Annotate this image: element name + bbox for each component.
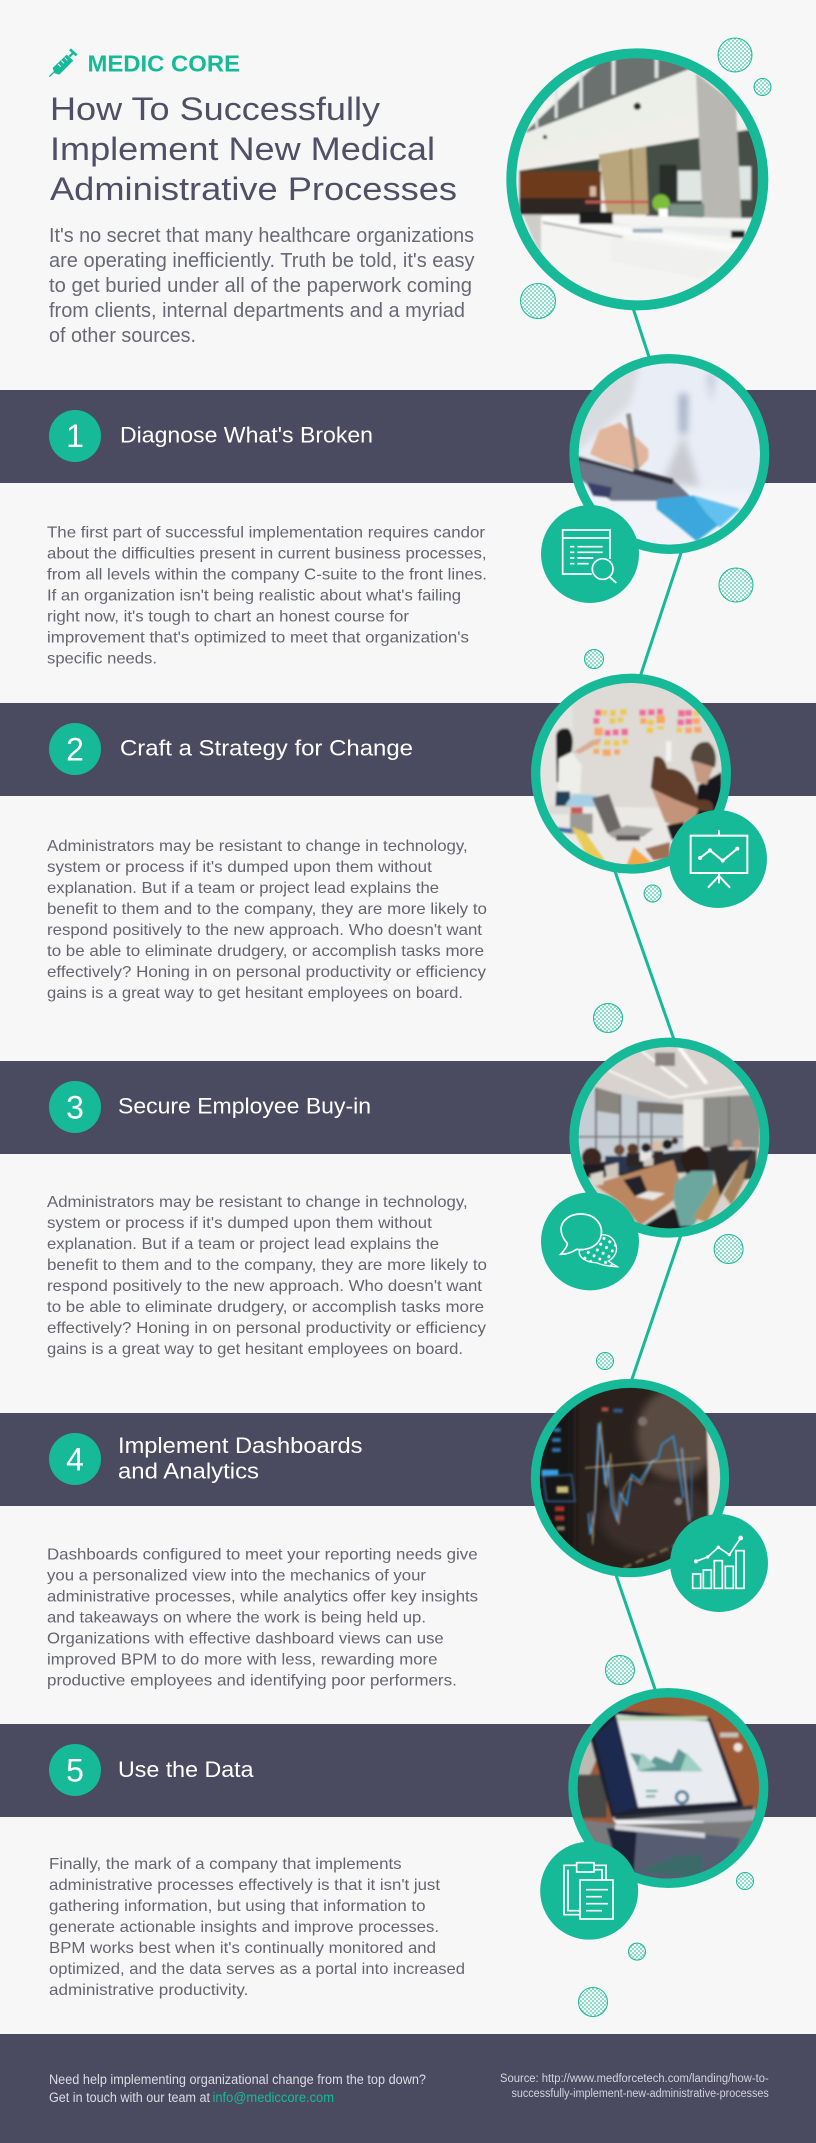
- connector line: step 1 to step 2: [640, 550, 682, 677]
- step 3 body text: gains is a great way to get hesitant employees on board.: [47, 1341, 463, 1358]
- step 1 body text: [47, 524, 487, 668]
- step 3 body text: system or process if it's dumped upon them without: [47, 1215, 432, 1232]
- step 5 body text: gathering information, but using that information to: [49, 1898, 426, 1915]
- intro text: It's no secret that many healthcare organizations: [49, 225, 474, 247]
- intro text: of other sources.: [49, 325, 196, 347]
- step 3 body text: effectively? Honing in on personal productivity or efficiency: [47, 1320, 486, 1337]
- step 5 heading: Use the Data: [118, 1757, 254, 1782]
- intro text: are operating inefficiently. Truth be told, it's easy: [49, 250, 474, 272]
- hero photo: hospital lobby: [506, 48, 770, 312]
- step 3 heading: Secure Employee Buy-in: [118, 1094, 371, 1118]
- step 5 heading: [49, 1744, 254, 1796]
- connector line: hero to step 1: [633, 308, 650, 360]
- step 5 body text: [49, 1856, 465, 1999]
- title: Implement New Medical: [50, 131, 435, 167]
- step 4 body text: and takeaways on where the work is being held up.: [47, 1610, 426, 1627]
- step 2 body text: respond positively to the new approach. Who doesn't want: [47, 922, 483, 939]
- step 4 body text: you a personalized view into the mechanics of your: [47, 1568, 426, 1585]
- step 3 body text: respond positively to the new approach. Who doesn't want: [47, 1278, 483, 1295]
- step 1 body text: right now, it's tough to chart an honest course for: [47, 608, 409, 626]
- step 1 body text: The first part of successful implementation requires candor: [47, 524, 485, 542]
- intro text: to get buried under all of the paperwork coming: [49, 275, 472, 297]
- step 4 photo: trading charts on screen: [530, 1378, 737, 1585]
- footer call to action: Get in touch with our team at: [49, 2090, 210, 2105]
- footer source: [500, 2073, 769, 2100]
- title: How To Successfully: [50, 91, 380, 127]
- intro text: from clients, internal departments and a myriad: [49, 300, 465, 322]
- step 3 body text: [47, 1194, 487, 1358]
- step 2 heading: [49, 723, 413, 775]
- step 1 body text: from all levels within the company C-suite to the front lines.: [47, 566, 487, 584]
- step 5 body text: optimized, and the data serves as a portal into increased: [49, 1961, 465, 1978]
- band: step 2: [0, 703, 816, 796]
- step 2 heading: Craft a Strategy for Change: [120, 736, 413, 760]
- step 1 body text: specific needs.: [47, 650, 157, 668]
- footer source: successfully-implement-new-administrative-processes: [512, 2088, 769, 2100]
- step 2 body text: gains is a great way to get hesitant employees on board.: [47, 985, 463, 1002]
- step 4 heading: [49, 1433, 362, 1485]
- step 2 body text: system or process if it's dumped upon them without: [47, 859, 432, 876]
- step 5 body text: administrative productivity.: [49, 1982, 248, 1999]
- icon: clipboard documents: [540, 1842, 638, 1940]
- band: step 1: [0, 390, 816, 483]
- step 2 body text: explanation. But if a team or project lead explains the: [47, 880, 439, 897]
- step 5 body text: Finally, the mark of a company that implements: [49, 1856, 402, 1873]
- step 5 body text: generate actionable insights and improve processes.: [49, 1919, 439, 1936]
- step 3 body text: to be able to eliminate drudgery, or accomplish tasks more: [47, 1299, 484, 1316]
- step 3 heading: [49, 1081, 371, 1133]
- band: step 3: [0, 1061, 816, 1154]
- step 5 heading: 5: [66, 1752, 84, 1788]
- step 4 body text: productive employees and identifying poor performers.: [47, 1673, 457, 1690]
- step 4 body text: [47, 1547, 478, 1690]
- step 3 body text: explanation. But if a team or project lead explains the: [47, 1236, 439, 1253]
- footer call to action: Need help implementing organizational change from the top down?: [49, 2072, 426, 2087]
- icon: report with magnifier: [541, 505, 639, 603]
- connector line: step 2 to step 3: [614, 870, 674, 1041]
- step 3 body text: Administrators may be resistant to change in technology,: [47, 1194, 468, 1211]
- step 1 heading: Diagnose What's Broken: [120, 422, 373, 448]
- step 1 body text: improvement that's optimized to meet that organization's: [47, 630, 469, 646]
- title: Administrative Processes: [50, 171, 457, 207]
- step 2 body text: Administrators may be resistant to change in technology,: [47, 838, 468, 855]
- band: step 4: [0, 1413, 816, 1506]
- step 3 body text: benefit to them and to the company, they are more likely to: [47, 1257, 487, 1274]
- connector line: step 4 to step 5: [616, 1575, 656, 1692]
- step 2 body text: to be able to eliminate drudgery, or accomplish tasks more: [47, 943, 484, 960]
- step 1 body text: If an organization isn't being realistic about what's failing: [47, 588, 461, 604]
- step 1 heading: [49, 410, 373, 462]
- step 2 heading: 2: [66, 732, 84, 768]
- step 2 body text: benefit to them and to the company, they are more likely to: [47, 901, 487, 918]
- connector line: step 3 to step 4: [631, 1235, 681, 1382]
- icon: syringe: [49, 49, 77, 77]
- step 3 heading: 3: [66, 1090, 84, 1126]
- decorative hatched dots: [520, 38, 771, 2016]
- step 4 body text: improved BPM to do more with less, rewarding more: [47, 1652, 438, 1669]
- step 1 body text: about the difficulties present in current business processes,: [47, 546, 486, 562]
- step 2 body text: effectively? Honing in on personal productivity or efficiency: [47, 964, 486, 981]
- step 5 body text: BPM works best when it's continually monitored and: [49, 1940, 436, 1957]
- step 4 heading: Implement Dashboards: [118, 1433, 362, 1458]
- step 1 heading: 1: [66, 418, 84, 454]
- step 1 photo: doctor with tablet: [567, 354, 773, 561]
- step 4 heading: 4: [66, 1442, 84, 1478]
- icon: presentation board with chart: [669, 810, 767, 908]
- intro text: [49, 225, 474, 347]
- logo: Medic Core: MEDIC CORE: [88, 50, 240, 76]
- step 2 body text: [47, 838, 487, 1002]
- footer band: [0, 2034, 816, 2143]
- footer source: Source: http://www.medforcetech.com/landing/how-to-: [500, 2073, 769, 2085]
- step 3 photo: boardroom meeting: [567, 1036, 773, 1243]
- step 5 body text: administrative processes effectively is that it isn't just: [49, 1877, 441, 1894]
- step 4 body text: Organizations with effective dashboard views can use: [47, 1631, 444, 1648]
- icon: speech bubbles: [541, 1192, 639, 1290]
- step 4 heading: and Analytics: [118, 1458, 259, 1484]
- step 2 photo: team at sticky-note wall: [530, 672, 737, 879]
- step 4 body text: administrative processes, while analytics offer key insights: [47, 1589, 478, 1606]
- icon: bar chart with trend line: [670, 1514, 768, 1612]
- step 4 body text: Dashboards configured to meet your reporting needs give: [47, 1547, 478, 1564]
- footer call to action: info@mediccore.com: [212, 2090, 334, 2105]
- footer call to action: [49, 2072, 426, 2105]
- title: [50, 91, 457, 207]
- step 5 photo: laptop analytics dashboard: [567, 1688, 773, 1895]
- band: step 5: [0, 1724, 816, 1817]
